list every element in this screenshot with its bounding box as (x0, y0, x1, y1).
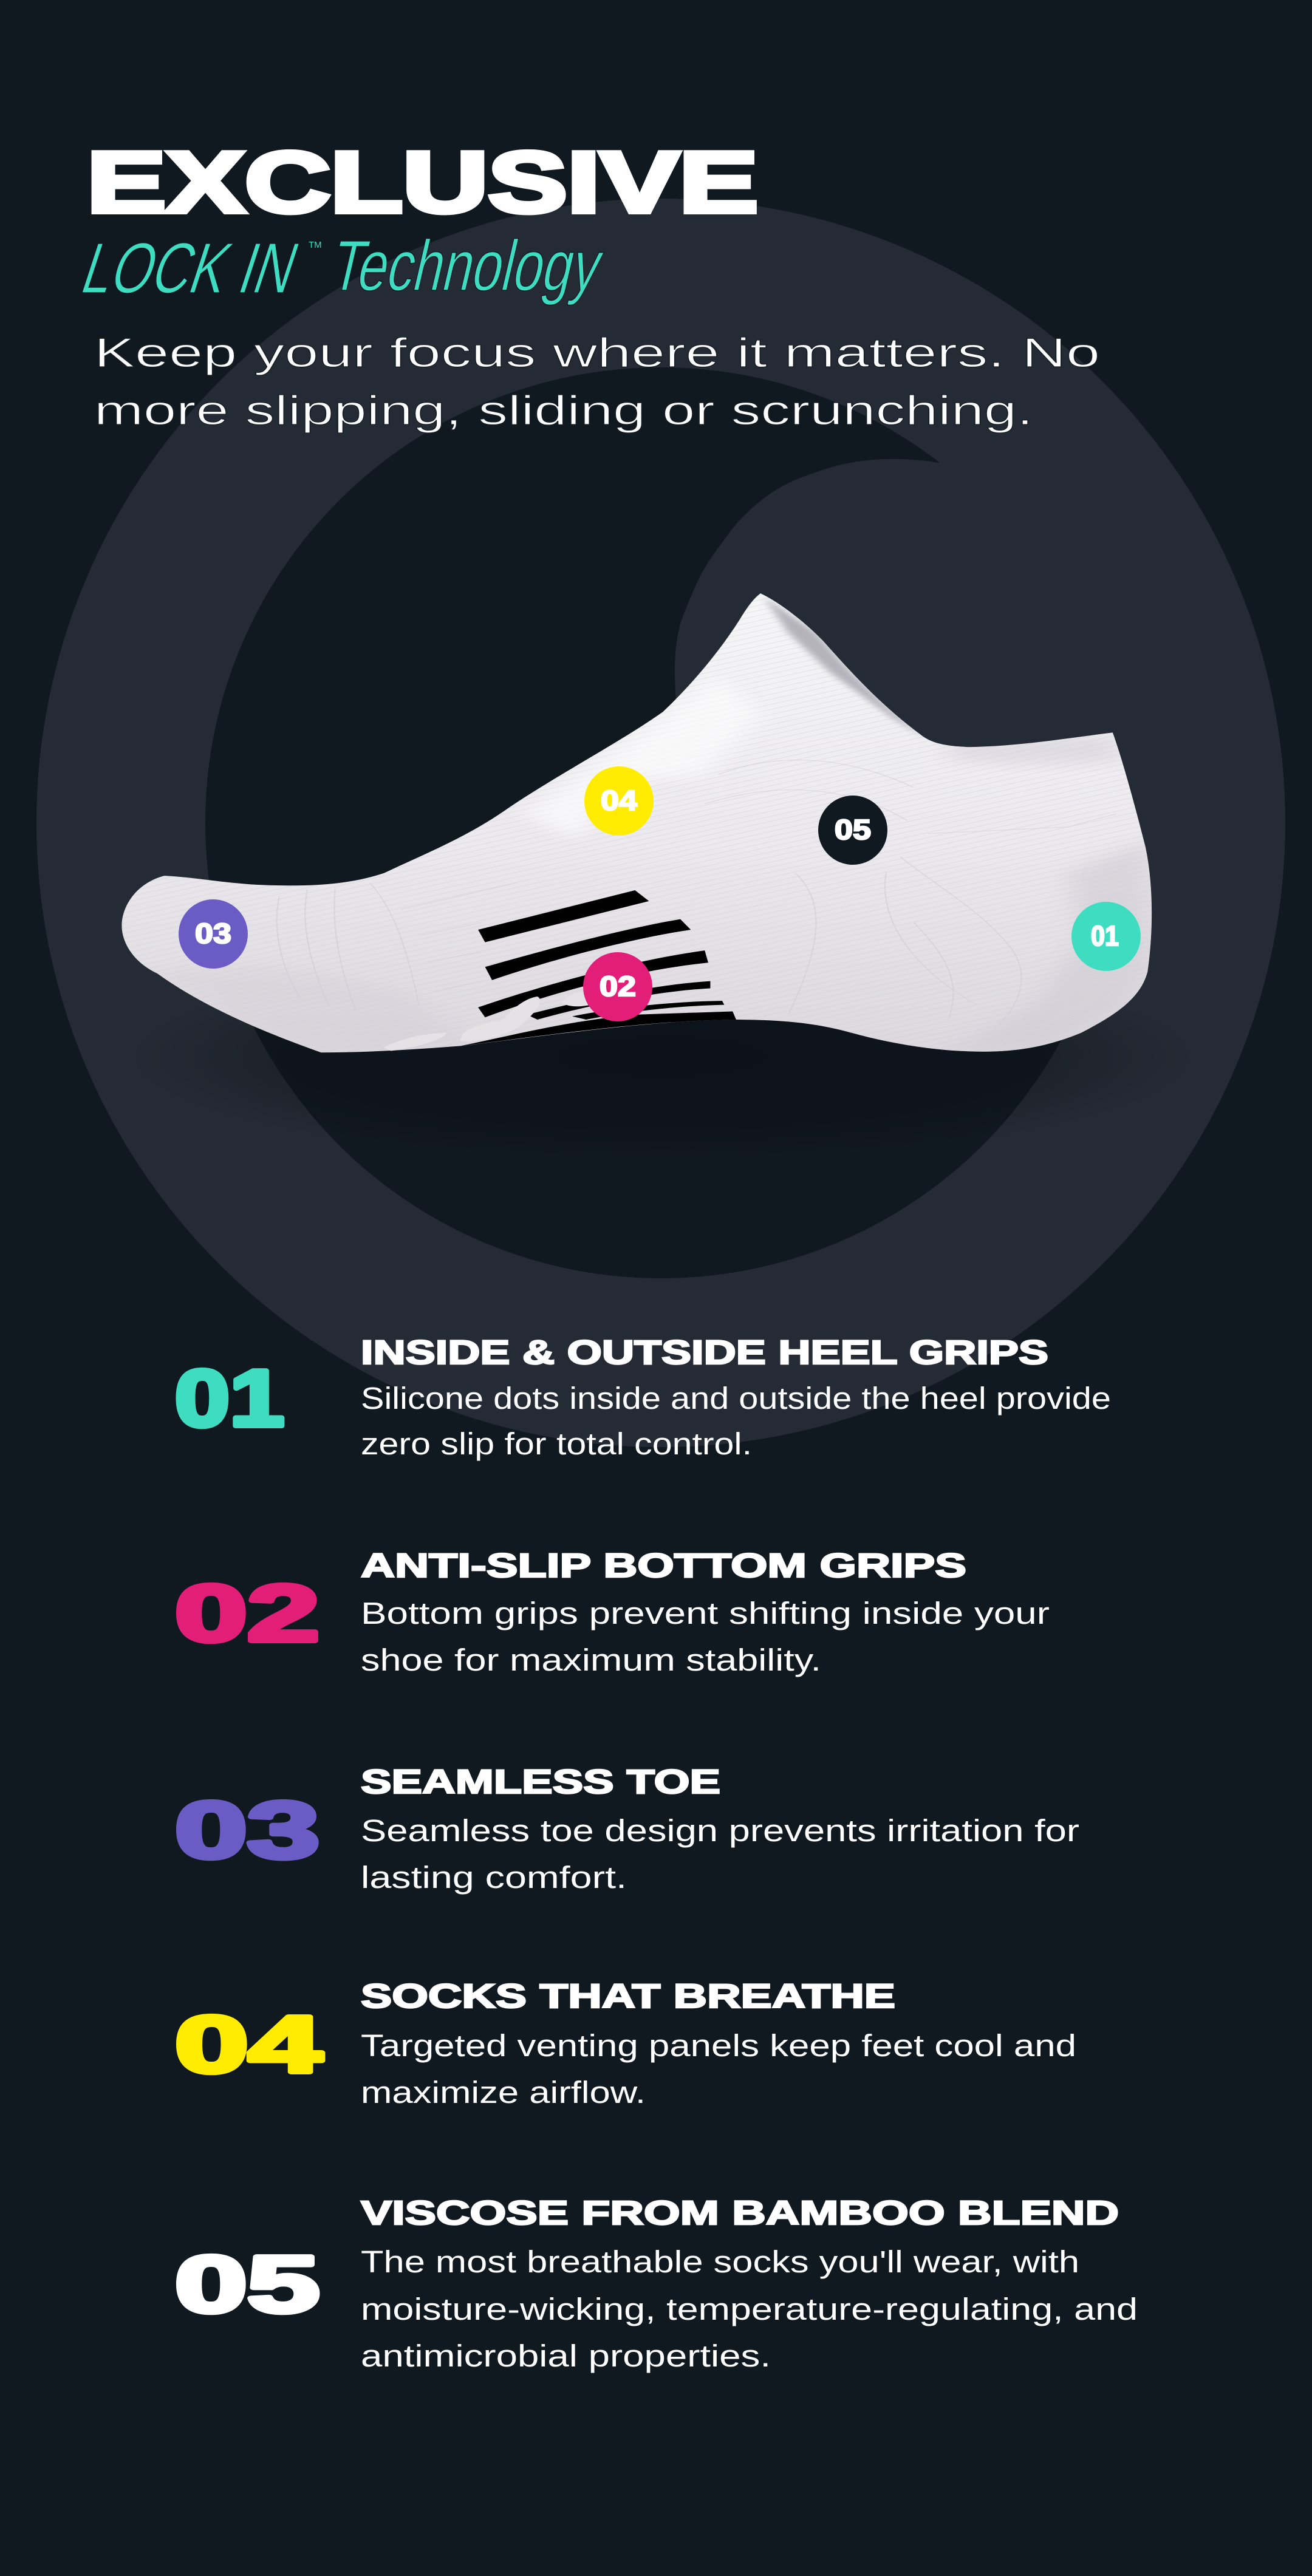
description 02: Bottom grips prevent shifting inside your (361, 1596, 1050, 1630)
description 02 (361, 1596, 1050, 1677)
number 05: 05 (175, 2240, 319, 2329)
feature 04 (175, 1977, 1076, 2110)
description 04: Targeted venting panels keep feet cool and (361, 2028, 1076, 2063)
description 04 (361, 2028, 1076, 2110)
description 03 (361, 1813, 1079, 1895)
script subtitle: TM (309, 240, 322, 250)
badge 01: 01 (1091, 920, 1119, 952)
heading 02: ANTI-SLIP BOTTOM GRIPS (361, 1546, 966, 1584)
description 05: antimicrobial properties. (361, 2339, 771, 2373)
feature 03 (175, 1762, 1079, 1895)
badge 04: 04 (601, 785, 637, 816)
description 03: Seamless toe design prevents irritation for (361, 1813, 1079, 1848)
badge 01 (1071, 902, 1141, 971)
heading 05: VISCOSE FROM BAMBOO BLEND (361, 2193, 1119, 2232)
script subtitle: Technology (324, 226, 610, 306)
intro text: more slipping, sliding or scrunching. (94, 387, 1033, 434)
intro text (94, 330, 1100, 434)
badge 04 (584, 766, 654, 836)
number 04: 04 (175, 2000, 322, 2089)
badge 05: 05 (835, 814, 871, 845)
script subtitle (73, 226, 610, 308)
script subtitle: LOCK IN (73, 228, 309, 308)
description 04: maximize airflow. (361, 2075, 646, 2110)
feature 01 (175, 1333, 1111, 1461)
badge 05 (818, 796, 887, 865)
number 03: 03 (175, 1785, 319, 1875)
badge 03: 03 (195, 918, 231, 949)
heading 04: SOCKS THAT BREATHE (361, 1977, 895, 2015)
description 01 (361, 1381, 1111, 1461)
heading 01: INSIDE & OUTSIDE HEEL GRIPS (361, 1333, 1048, 1371)
badge 02 (583, 952, 652, 1021)
description 03: lasting comfort. (361, 1860, 627, 1895)
background swirl logo (36, 199, 1285, 1447)
silicone grips (384, 990, 600, 1051)
badge 02: 02 (600, 970, 636, 1002)
number 01: 01 (175, 1354, 284, 1443)
feature 02 (175, 1546, 1050, 1677)
title: EXCLUSIVE (87, 134, 758, 231)
heading 03: SEAMLESS TOE (361, 1762, 720, 1801)
description 01: Silicone dots inside and outside the heel provide (361, 1381, 1111, 1416)
number 02: 02 (175, 1569, 319, 1658)
sock shadow (128, 953, 1197, 1160)
feature 05 (175, 2193, 1138, 2373)
description 05 (361, 2244, 1138, 2373)
grip stripes (460, 890, 736, 1046)
description 01: zero slip for total control. (361, 1426, 752, 1461)
description 02: shoe for maximum stability. (361, 1643, 821, 1677)
sock illustration (121, 593, 1152, 1053)
badge 03 (179, 899, 248, 969)
description 05: moisture-wicking, temperature-regulating, and (361, 2292, 1138, 2326)
intro text: Keep your focus where it matters. No (94, 330, 1100, 376)
description 05: The most breathable socks you'll wear, with (361, 2244, 1079, 2279)
